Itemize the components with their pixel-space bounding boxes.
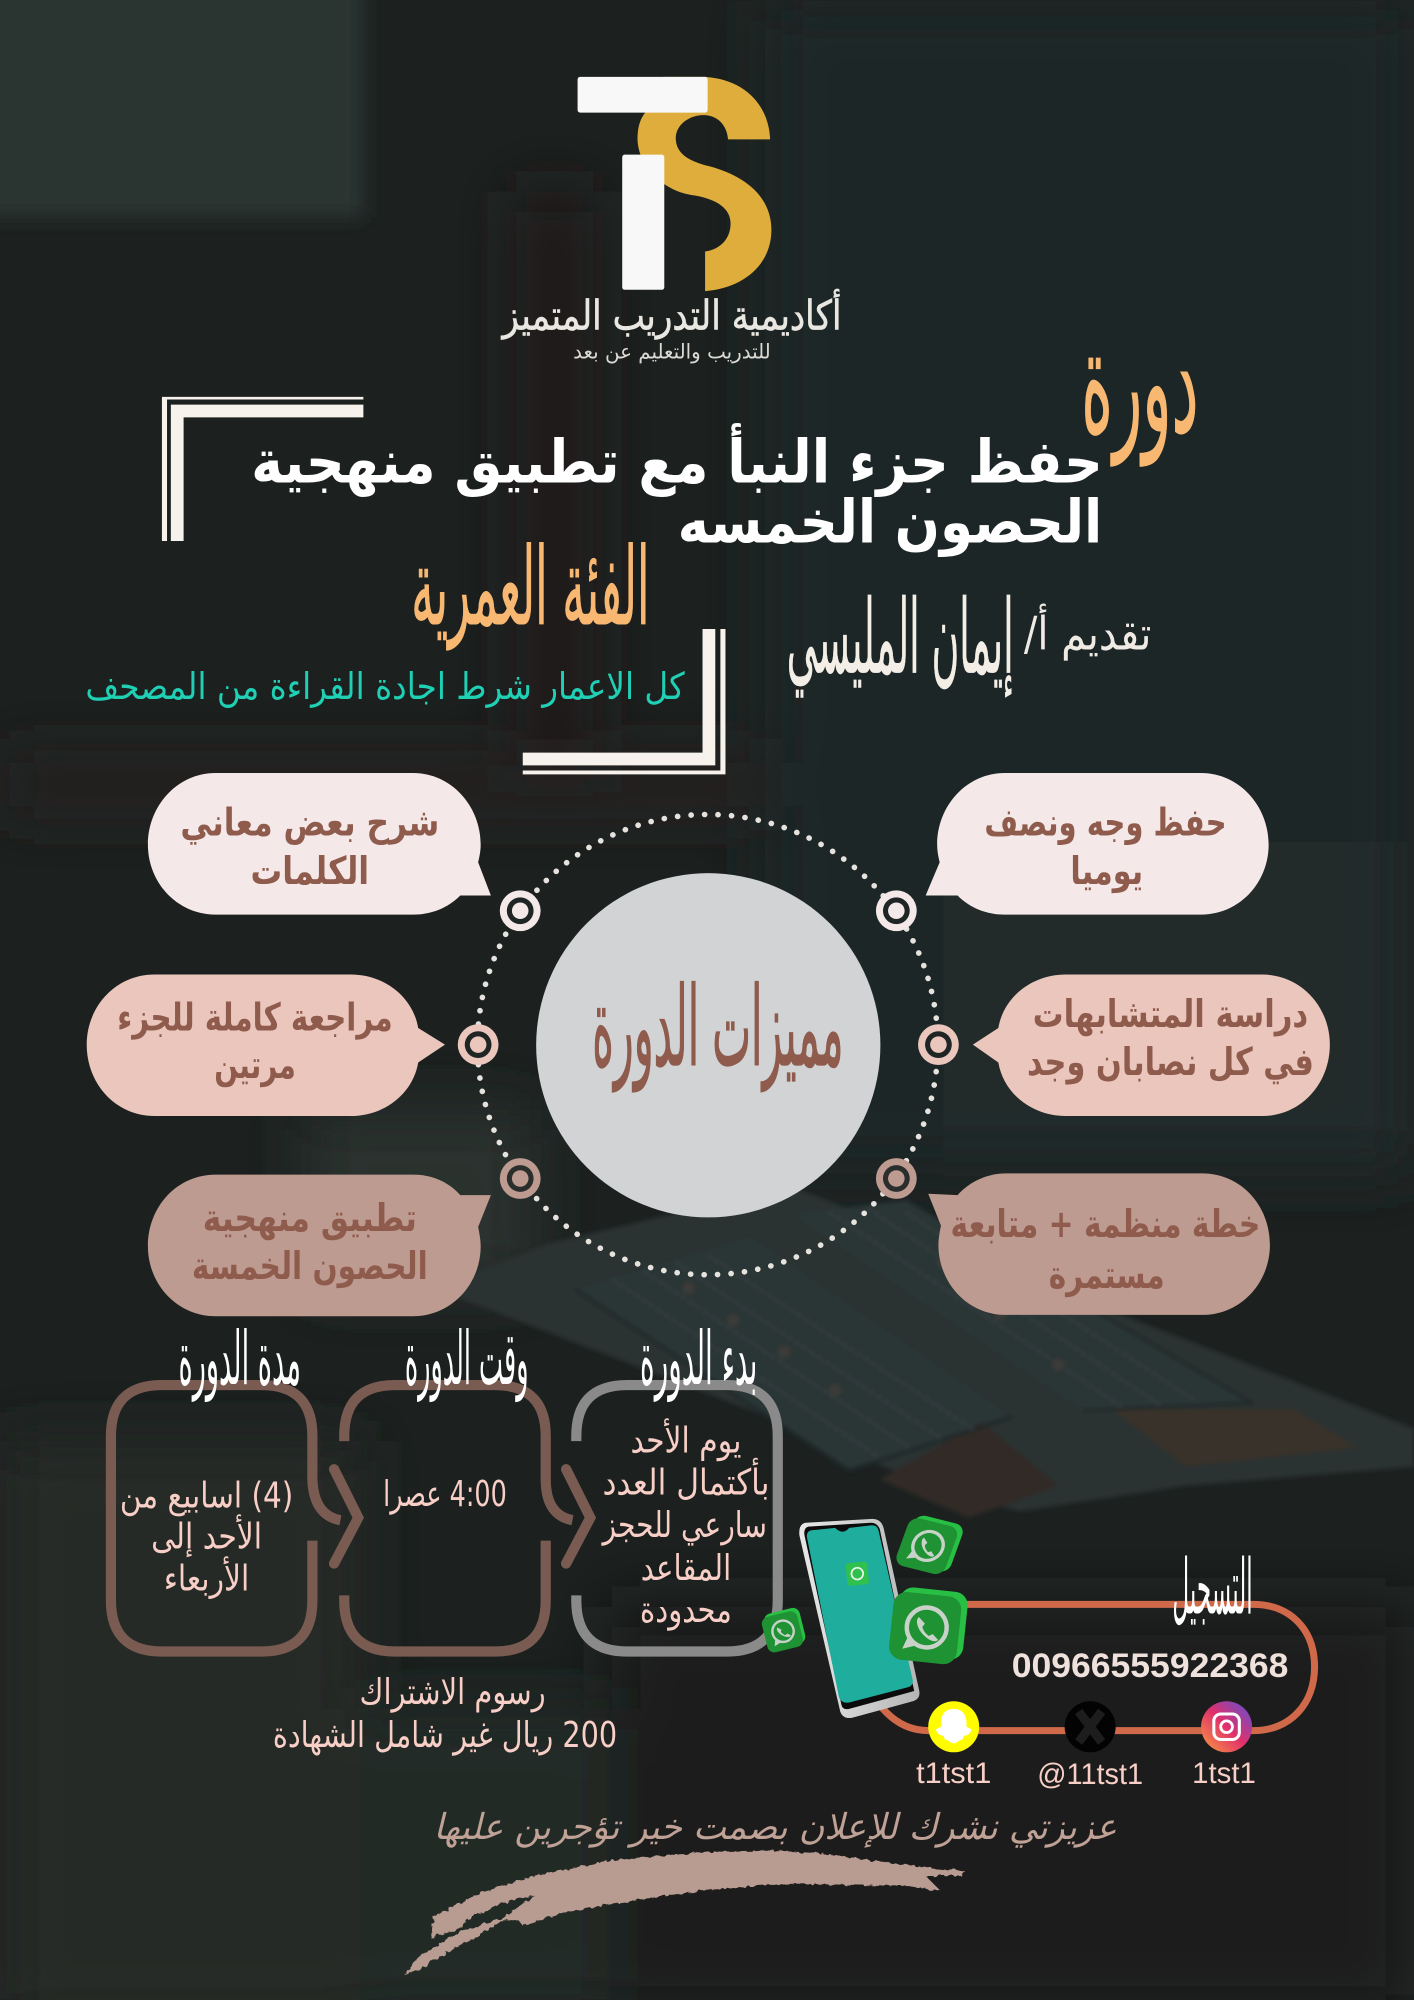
course title: الحصون الخمسه — [678, 487, 1102, 557]
bubble: organized plan: مستمرة — [1049, 1253, 1165, 1298]
icon: large whatsapp — [888, 1586, 969, 1666]
panel: course start — [566, 1316, 778, 1652]
corner frame top-left — [162, 397, 363, 541]
logo — [501, 77, 842, 364]
icon: instagram — [1201, 1701, 1252, 1752]
bubble: daily memorization — [926, 773, 1269, 915]
subscription fees: رسوم الاشتراك — [360, 1672, 546, 1713]
panel: course time — [334, 1316, 572, 1652]
text: مدة الدورة — [179, 1316, 301, 1402]
icon: phone — [799, 1519, 919, 1718]
academy name: أكاديمية التدريب المتميز — [501, 288, 842, 339]
bubble: similar verses: دراسة المتشابهات — [1033, 992, 1308, 1037]
panel: course duration: الأربعاء — [164, 1555, 249, 1599]
phone number: 00966555922368 — [1012, 1647, 1288, 1685]
bubble: daily memorization: يوميا — [1070, 849, 1143, 894]
arrow between duration and time — [334, 1469, 358, 1564]
subscription fees: 200 ريال غير شامل الشهادة — [273, 1715, 617, 1756]
bubble: word meanings: الكلمات — [251, 849, 369, 894]
panel: course duration: (4) اسابيع من — [120, 1475, 293, 1516]
corner frame bottom-right — [523, 629, 725, 774]
panel: course duration — [111, 1316, 340, 1652]
bubble: full review: مراجعة كاملة للجزء — [117, 996, 393, 1041]
features diagram: مميزات الدورة — [592, 963, 843, 1092]
panel: course time: 4:00 عصرا — [383, 1474, 507, 1515]
panel: course start: سارعي للحجز — [601, 1505, 767, 1546]
bubble: daily memorization: حفظ وجه ونصف — [984, 801, 1227, 846]
course title: حفظ جزء النبأ مع تطبيق منهجية — [251, 422, 1103, 497]
bubble: five fortresses method: تطبيق منهجية — [203, 1196, 417, 1241]
panel: course start: يوم الأحد — [630, 1418, 741, 1462]
bubble: five fortresses method: الحصون الخمسة — [192, 1244, 428, 1289]
text: إيمان المليسي — [787, 578, 1014, 697]
bubble: organized plan — [928, 1173, 1270, 1315]
node middle-left — [458, 1024, 499, 1065]
bubble: five fortresses method — [148, 1175, 491, 1316]
node bottom-right — [876, 1158, 917, 1199]
node top-left — [500, 890, 541, 931]
handle: instagram: 1tst1 — [1192, 1757, 1256, 1790]
panel: course start: محدودة — [640, 1590, 732, 1631]
node bottom-left — [500, 1158, 541, 1199]
arrow between time and start — [566, 1469, 590, 1564]
logo S — [638, 77, 771, 291]
logo T stem — [622, 155, 664, 290]
logo T bar — [578, 77, 708, 113]
node middle-right — [918, 1024, 959, 1065]
handle: snapchat: t1tst1 — [916, 1757, 991, 1790]
bubble: organized plan: خطة منظمة + متابعة — [951, 1202, 1260, 1247]
open book — [434, 1186, 1414, 1518]
course title — [251, 422, 1103, 557]
text: دورة — [1081, 298, 1199, 466]
top-left blurred panel — [0, 0, 363, 217]
text: وقت الدورة — [405, 1316, 528, 1402]
panel: course start: بأكتمال العدد — [602, 1458, 769, 1504]
icon: small whatsapp — [760, 1606, 807, 1654]
icon: whatsapp on screen — [845, 1561, 869, 1586]
center circle — [536, 873, 880, 1217]
panel: course start: المقاعد — [641, 1548, 731, 1589]
text: بدء الدورة — [640, 1316, 757, 1402]
panel: course duration: الأحد إلى — [151, 1513, 262, 1557]
bubble: full review: مرتين — [214, 1043, 296, 1088]
bubble: full review — [87, 974, 445, 1116]
dotted ring — [477, 814, 938, 1275]
bubble: word meanings — [148, 773, 491, 915]
brush stroke — [404, 1850, 965, 1975]
icon: top whatsapp — [894, 1513, 966, 1577]
text: الفئة العمرية — [411, 526, 650, 650]
features diagram — [87, 773, 1330, 1316]
handle: x: @11tst1 — [1037, 1758, 1143, 1791]
icon: snapchat — [928, 1701, 979, 1752]
age group note: كل الاعمار شرط اجادة القراءة من المصحف — [85, 665, 685, 708]
bubble: similar verses — [973, 974, 1330, 1116]
academy tagline: للتدريب والتعليم عن بعد — [573, 340, 771, 364]
registration outline — [880, 1604, 1315, 1731]
bubble: similar verses: في كل نصابان وجد — [1027, 1040, 1314, 1085]
subscription fees — [273, 1672, 617, 1756]
bubble: word meanings: شرح بعض معاني — [180, 801, 439, 846]
node top-right — [876, 890, 917, 931]
registration block — [916, 1543, 1288, 1791]
icon: x — [1065, 1701, 1116, 1752]
footer message: عزيزتي نشرك للإعلان بصمت خير تؤجرين عليها — [434, 1807, 1117, 1848]
presenter label: تقديم أ/ — [1024, 603, 1151, 660]
